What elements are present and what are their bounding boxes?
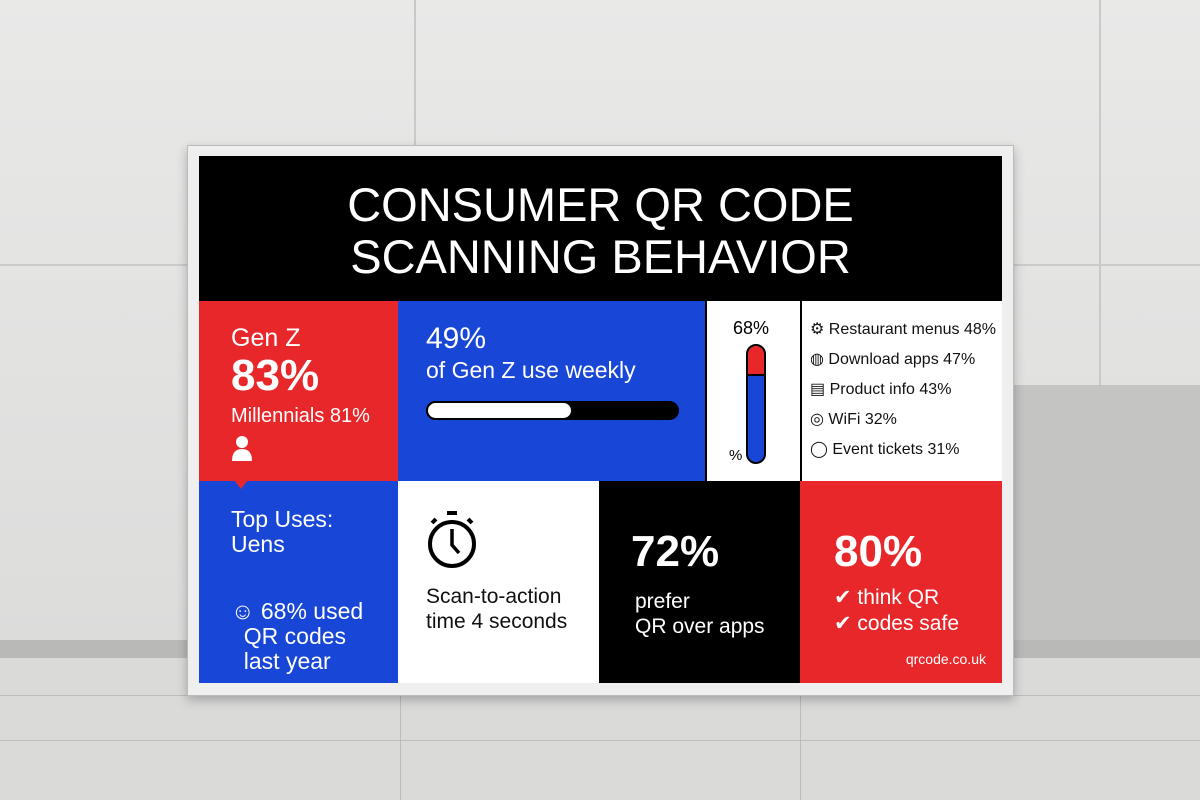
panel: top uses: last year [244, 648, 331, 674]
panel: safety: 80% [834, 527, 922, 576]
panel: safety: ✔ think QR [834, 586, 939, 609]
panel: uses list [800, 301, 1002, 481]
panel: uses list: ◎ WiFi 32% [810, 411, 897, 428]
panel: top uses [199, 481, 398, 683]
panel: safety [800, 481, 1002, 683]
panel: weekly use: of Gen Z use weekly [426, 357, 636, 383]
floor [0, 640, 1200, 800]
gauge [746, 344, 766, 464]
panel: thermometer: % [729, 447, 742, 464]
panel: uses list: ◯ Event tickets 31% [810, 441, 960, 458]
panel: top uses: Top Uses: [231, 506, 333, 532]
panel: weekly use [398, 301, 705, 481]
title banner: SCANNING BEHAVIOR [350, 230, 851, 283]
icon: stopwatch [428, 511, 476, 568]
title banner [199, 156, 1002, 301]
panel: thermometer: 68% [733, 318, 769, 338]
panel: scan time [398, 481, 599, 683]
panel: prefer QR: 72% [631, 527, 719, 576]
panel: thermometer [705, 301, 800, 481]
panel: prefer QR: prefer [635, 590, 690, 613]
panel: uses list: ▤ Product info 43% [810, 381, 951, 398]
billboard frame [187, 145, 1014, 696]
panel: prefer QR [599, 481, 800, 683]
title banner: CONSUMER QR CODE [347, 178, 854, 231]
icon: person [232, 436, 252, 461]
panel: scan time: time 4 seconds [426, 610, 567, 633]
panel: Gen Z: Millennials 81% [231, 405, 370, 427]
panel: uses list: ◍ Download apps 47% [810, 351, 975, 368]
panel: uses list: ⚙ Restaurant menus 48% [810, 321, 996, 338]
panel: top uses: QR codes [244, 623, 346, 649]
panel: weekly use: 49% [426, 322, 486, 355]
panel: Gen Z: 83% [231, 351, 319, 400]
panel: safety: qrcode.co.uk [906, 651, 986, 667]
panel: Gen Z [199, 301, 398, 481]
panel: top uses: Uens [231, 531, 285, 557]
panel: Gen Z: Gen Z [231, 324, 300, 352]
progress bar [426, 401, 679, 420]
panel: top uses: ☺ 68% used [231, 598, 363, 624]
panel: safety: ✔ codes safe [834, 612, 959, 635]
panel: scan time: Scan-to-action [426, 585, 561, 608]
panel: prefer QR: QR over apps [635, 615, 765, 638]
